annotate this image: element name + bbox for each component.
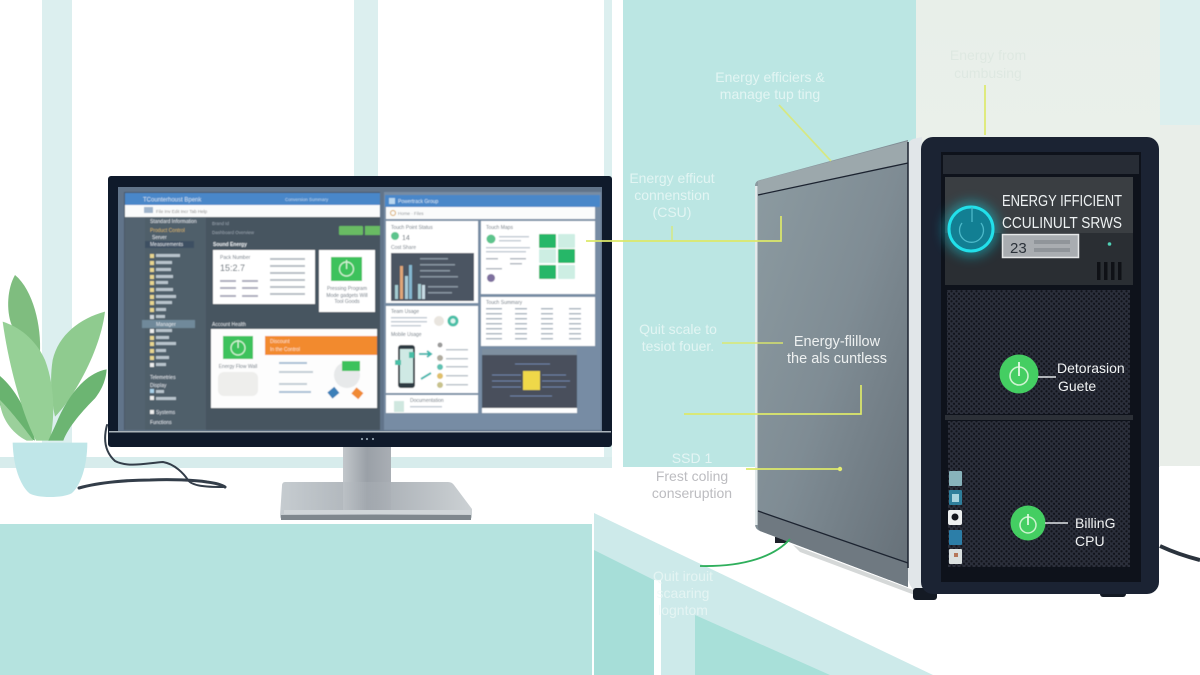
header bar: Powertrack Group [398,199,439,205]
left rail [125,217,145,430]
glowing power button [944,202,998,256]
callout: energy efficient connection: (CSU) [653,204,691,220]
main area with cards: Account Health [212,322,246,328]
server side label: the als cuntless [787,351,887,367]
callout: quit circuit: Quit irouit [653,568,713,584]
table card: Touch Summary [486,300,523,306]
documentation card: Documentation [410,398,444,404]
energy report card: Discount [270,339,290,345]
documentation card [386,395,478,413]
power status card: Tool Goods [334,299,360,305]
callout: quit scale: Quit scale to [639,321,717,337]
green power button: Billing CPU [1010,506,1115,549]
callout: quit scale: tesiot fouer. [642,338,714,354]
digital display [1002,234,1078,258]
monitor cable [79,425,225,488]
main area with cards: Dashboard Overview [212,230,255,235]
plant pot [13,443,87,497]
callout: energy efficient connection: connenstion [634,187,710,203]
toolbar [125,205,380,217]
callout: SSD cooling [652,450,732,501]
energy report card [211,329,377,408]
server title [1002,193,1122,232]
main area with cards [206,217,380,430]
callout: SSD cooling: conseruption [652,485,732,501]
callout: energy from computing: Energy from [950,47,1026,63]
mobile app card: Team Usage [391,309,419,315]
main area with cards: Sound Energy [213,242,247,248]
callout: SSD cooling: Frest coling [656,468,728,484]
energy report card: Energy Flow Wall [219,364,257,370]
right application window [384,192,601,430]
chart card [386,221,478,303]
green power button: Detorasion: Detorasion [1057,360,1125,376]
stats card [213,250,315,304]
mobile app card: Mobile Usage [391,332,422,338]
callout: energy efficiers: manage tup ting [720,86,820,102]
sidebar tree: Product Control [150,228,185,234]
search bar: Home · Files [398,211,424,216]
callout: quit circuit: logntom [658,602,708,618]
monitor stand [280,446,472,520]
callout: energy efficiers: Energy efficiers & [715,69,825,85]
sidebar tree: Display [150,383,167,389]
header bar [125,193,380,205]
digital display: 23 [1010,240,1027,257]
monitor [108,176,612,447]
sidebar tree: Server [152,235,167,241]
server power cable [1160,546,1200,560]
monitor bezel [108,176,612,447]
green tiles card [481,221,595,294]
green tiles card: Touch Maps [486,225,513,231]
energy report card: In the Control [270,347,300,353]
green power button: Detorasion: Guete [1058,378,1096,394]
server side label: Energy-flillow [794,334,881,350]
server title: CCULINULT SRWS [1002,215,1122,232]
left application window [124,192,380,430]
server title: ENERGY IFFICIENT [1002,193,1122,210]
server feet [913,588,1126,600]
table card [481,297,595,346]
main area with cards: Brand Id [212,221,230,226]
chart card: Cost Share [391,245,416,251]
callout: SSD cooling: SSD 1 [672,450,712,466]
sidebar tree: Standard Information [150,219,197,225]
power status card [319,250,375,312]
green power button: Detorasion [1000,354,1125,394]
callout: energy efficient connection: Energy efficut [629,170,715,186]
sidebar tree: Systems [156,410,176,416]
potted plant [0,275,107,497]
search bar [386,207,595,219]
sidebar tree: Manager [156,322,176,328]
callout lines [586,85,985,566]
lower mesh panel [948,421,1130,567]
server front [908,137,1159,600]
header bar: Conversion Summary [285,197,329,202]
chart card: Touch Point Status [391,225,433,231]
header bar: TCounterhoust Bpenk [143,198,202,204]
mobile app card [386,306,478,393]
sidebar tree [142,217,206,430]
processor diagram card [482,349,577,413]
power status card: Mode gadgets Will [326,293,368,299]
vent slots [1097,262,1122,280]
stats card: 15:2.7 [220,263,245,273]
toolbar: File Inv Edit Incr Tab Help [156,209,208,214]
callout: energy from computing: cumbusing [954,65,1022,81]
header bar [385,195,600,207]
sidebar tree: Telemetries [150,375,176,381]
green power button: Billing CPU: BillinG [1075,515,1115,531]
action buttons [339,226,380,235]
green power button: Billing CPU: CPU [1075,533,1105,549]
callout: quit circuit: scaaring [657,585,709,601]
status LED [1108,242,1111,246]
sidebar tree: Functions [150,420,172,426]
power status card: Pressing Program [327,286,367,292]
server side panel [755,140,920,597]
chart card: 14 [402,235,410,242]
port icons [948,471,962,564]
stats card: Pack Number [220,255,251,261]
upper mesh panel [947,290,1130,414]
control panel [944,177,1133,285]
sidebar tree: Measurements [150,242,184,248]
